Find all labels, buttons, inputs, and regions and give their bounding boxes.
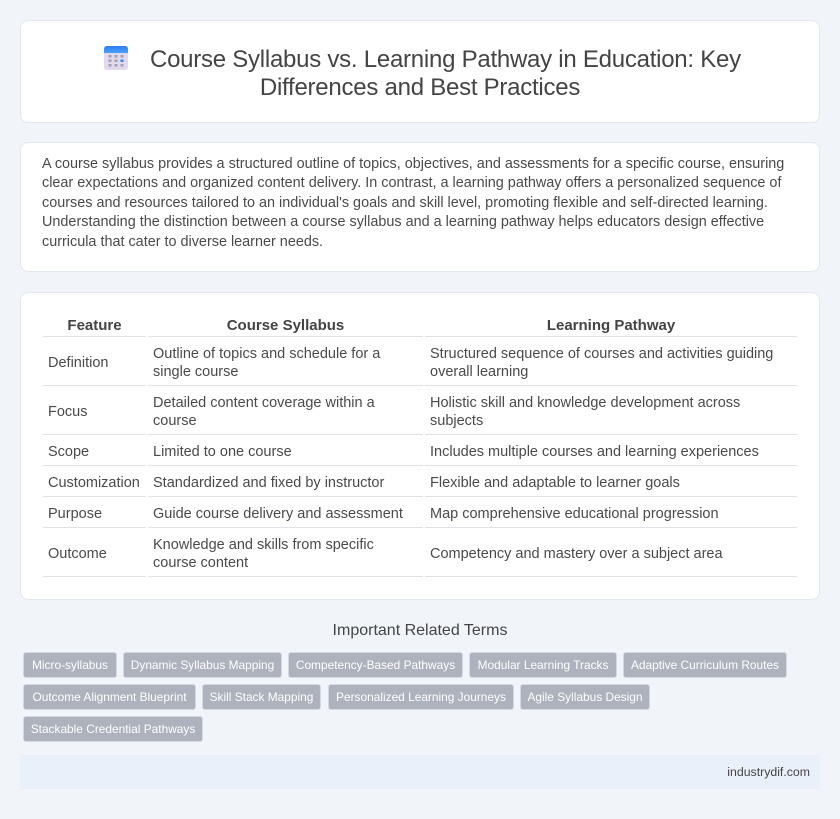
intro paragraph: curricula that cater to diverse learner needs. (42, 234, 323, 250)
table header: Learning Pathway (547, 317, 675, 334)
tag (202, 684, 321, 710)
row: focus (48, 395, 740, 429)
row: customization (48, 475, 680, 491)
comparison table (43, 317, 797, 577)
row: outcome (48, 537, 723, 571)
row: purpose: Map comprehensive educational progression (430, 506, 719, 522)
tag: Personalized Learning Journeys (336, 690, 506, 704)
tag (623, 652, 787, 678)
header panel (20, 20, 820, 123)
tag (23, 716, 203, 742)
row: purpose: Purpose (48, 506, 102, 522)
tag: Outcome Alignment Blueprint (32, 690, 186, 704)
row: outcome: Outcome (48, 546, 107, 562)
row: outcome: course content (153, 555, 248, 571)
row: customization: Customization (48, 475, 140, 491)
row: outcome: Knowledge and skills from specific (153, 537, 374, 553)
tag (123, 652, 282, 678)
row: purpose (48, 506, 719, 522)
related terms heading: Important Related Terms (333, 622, 507, 639)
table header (67, 317, 676, 334)
row: scope (48, 444, 759, 460)
tag: Modular Learning Tracks (478, 658, 608, 672)
tag (520, 684, 650, 710)
row: focus: subjects (430, 413, 483, 429)
tag (469, 652, 617, 678)
title (150, 46, 741, 101)
row: definition: overall learning (430, 364, 528, 380)
row: focus: Holistic skill and knowledge development across (430, 395, 740, 411)
table header: Course Syllabus (227, 317, 344, 334)
tag: Agile Syllabus Design (527, 690, 642, 704)
row: definition: Structured sequence of courses and activities guiding (430, 346, 773, 362)
comparison table panel (20, 292, 820, 600)
footer source text: industrydif.com (727, 765, 810, 779)
intro paragraph: A course syllabus provides a structured outline of topics, objectives, and assessments for a specific course, ensuring (42, 156, 784, 172)
row: purpose: Guide course delivery and assessment (153, 506, 403, 522)
row: customization: Flexible and adaptable to learner goals (430, 475, 680, 491)
related terms tags (23, 652, 787, 742)
tag: Skill Stack Mapping (210, 690, 313, 704)
row: focus: Detailed content coverage within a (153, 395, 375, 411)
tag (288, 652, 463, 678)
intro paragraph: clear expectations and organized content delivery. In contrast, a learning pathway offers a personalized sequence of (42, 175, 781, 191)
tag: Micro-syllabus (32, 658, 108, 672)
tag: Competency-Based Pathways (296, 658, 455, 672)
tag (23, 652, 117, 678)
intro paragraph: courses and resources tailored to an individual's goals and skill level, promoting flexible and self-directed learning. (42, 195, 768, 211)
intro paragraph: Understanding the distinction between a course syllabus and a learning pathway helps educators design effective (42, 214, 764, 230)
row: outcome: Competency and mastery over a subject area (430, 546, 723, 562)
row: definition (48, 346, 773, 380)
title: Course Syllabus vs. Learning Pathway in Education: Key (150, 46, 741, 73)
tag: Stackable Credential Pathways (31, 722, 195, 736)
intro paragraph (42, 156, 784, 250)
row: scope: Includes multiple courses and learning experiences (430, 444, 759, 460)
row: definition: Definition (48, 355, 108, 371)
row: definition: single course (153, 364, 238, 380)
table header: Feature (67, 317, 122, 334)
icon: calendar (104, 46, 128, 70)
tag (328, 684, 514, 710)
row: definition: Outline of topics and schedule for a (153, 346, 380, 362)
tag: Adaptive Curriculum Routes (631, 658, 779, 672)
row: focus: course (153, 413, 197, 429)
row: focus: Focus (48, 404, 88, 420)
row: scope: Limited to one course (153, 444, 292, 460)
footer bar (20, 755, 820, 789)
row: scope: Scope (48, 444, 89, 460)
row: customization: Standardized and fixed by instructor (153, 475, 384, 491)
tag (23, 684, 196, 710)
intro text panel (20, 142, 820, 272)
tag: Dynamic Syllabus Mapping (131, 658, 274, 672)
title: Differences and Best Practices (260, 74, 580, 101)
